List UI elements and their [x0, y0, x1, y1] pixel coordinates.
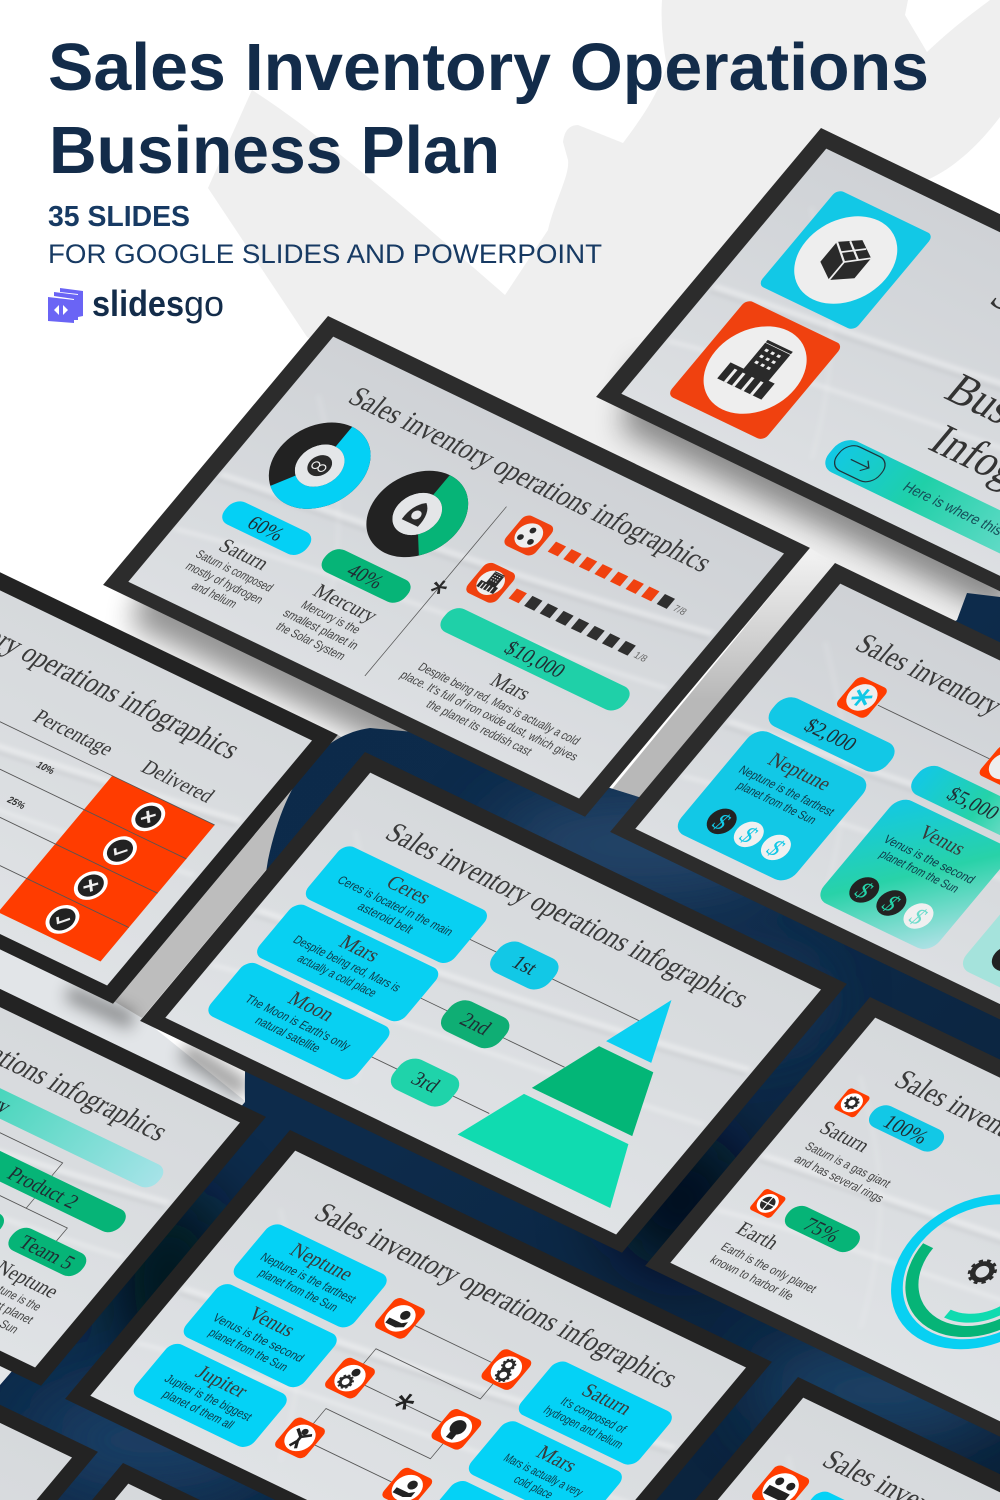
- pill: Product 2: Product 2: [2, 1163, 83, 1213]
- card: Neptune: [229, 1221, 391, 1331]
- icon: gears: [479, 1347, 534, 1392]
- pill: $5,000: [905, 761, 1000, 845]
- background: grey gap at left: [112, 735, 365, 1018]
- card: third right: [414, 1478, 577, 1500]
- connector lines: [0, 1108, 105, 1241]
- card: Moon: natural satellite: [252, 1014, 324, 1055]
- pill: $2,000: $2,000: [799, 715, 861, 756]
- icon: check: [96, 831, 144, 870]
- pill: 75%: [779, 1202, 865, 1256]
- icon: cyan asterisk: [834, 675, 889, 720]
- card: Neptune: $: [707, 809, 735, 836]
- subtitle: slide count: 35 SLIDES: [48, 201, 190, 233]
- text block: Saturn: Saturn: [214, 535, 274, 575]
- card: Ceres: Ceres: [381, 872, 435, 909]
- cover title: [876, 270, 1000, 548]
- progress bar: 1/8: 1/8: [631, 650, 650, 665]
- icon: check: [39, 900, 86, 939]
- pill: Team 5: [3, 1224, 92, 1280]
- card: Venus: Venus is the second: [880, 832, 978, 886]
- divider with asterisk: [358, 503, 513, 679]
- card: Moon: The Moon is Earth's only: [242, 992, 355, 1053]
- text block: Earth: Earth: [731, 1218, 783, 1254]
- connector line: [878, 705, 989, 759]
- donut chart: 60%: [266, 423, 373, 509]
- text block: Mars: the planet its reddish cast: [423, 697, 536, 758]
- panel: bottom left slide: [0, 1220, 98, 1500]
- card: Venus: Venus: [914, 822, 970, 860]
- card: Jupiter: planet of them all: [159, 1387, 237, 1432]
- card: Saturn: hydrogen and helium: [541, 1403, 626, 1451]
- radial gauge chart: [862, 1175, 1000, 1369]
- donut chart: 40%: [364, 471, 471, 557]
- card: Neptune: $: [734, 822, 762, 849]
- card: Mars: [464, 1418, 627, 1500]
- text block: Earth: Earth is the only planet: [718, 1240, 820, 1296]
- text block: Mars: place. It's full of iron oxide dust, which gives: [397, 668, 581, 764]
- background: navy silhouette: [0, 593, 1000, 1500]
- card: Neptune: Neptune: [763, 749, 836, 795]
- card: Ceres: asteroid belt: [354, 900, 417, 936]
- icon: light bulb: [429, 1407, 484, 1452]
- icon: box on cyan tile: [758, 189, 934, 331]
- card: Mars: actually a cold place: [294, 951, 380, 1000]
- pill: 60%: 60%: [242, 512, 289, 546]
- text block: Saturn: mostly of hydrogen: [183, 559, 266, 606]
- text block: Saturn: [791, 1117, 916, 1205]
- icon: center gear: [964, 1257, 1000, 1286]
- card: Moon: Moon: [283, 988, 339, 1026]
- text block: Saturn: Saturn: [815, 1117, 874, 1157]
- subtitle: compatibility: FOR GOOGLE SLIDES AND POWERPOINT: [48, 239, 602, 269]
- table headers: Percentage: [28, 706, 118, 760]
- pyramid chart: [458, 965, 752, 1208]
- title: [48, 30, 929, 188]
- card: third planet: [957, 864, 1000, 1022]
- text block: Mercury: [270, 576, 387, 664]
- text block: Mercury: Mercury: [308, 580, 383, 627]
- icon: cross: [67, 866, 115, 905]
- text block: Mars: Mars: [485, 670, 535, 705]
- card: Mars: Despite being red, Mars is: [290, 933, 404, 995]
- title: Business Plan: [49, 113, 500, 188]
- panel: donut charts and progress slide: [103, 316, 810, 817]
- panel: network slide: [65, 1130, 772, 1500]
- card: Jupiter: [129, 1341, 292, 1450]
- pill: 2nd: 2nd: [455, 1009, 496, 1040]
- pill: 1st: [484, 937, 565, 994]
- navy highlights: [30, 795, 1000, 1490]
- pill: $10,000: $10,000: [499, 637, 570, 682]
- pill: 2nd: [435, 996, 516, 1053]
- pill: 40%: [316, 545, 416, 606]
- pill: 100%: 100%: [878, 1111, 933, 1149]
- card: Venus: planet from the Sun: [205, 1326, 291, 1374]
- panel: gauge slide: [645, 997, 1000, 1498]
- text block: Mercury: smallest planet in: [280, 606, 362, 652]
- background: light grey silhouette: [208, 0, 1000, 800]
- card: Ceres: Ceres is located in the main: [334, 873, 456, 939]
- text block: Earth: [707, 1218, 839, 1309]
- pill: Inventory: [0, 1052, 169, 1191]
- card: Ceres: [301, 843, 492, 966]
- card: Neptune: planet from the Sun: [734, 779, 820, 827]
- text block: Mercury: Mercury is the: [298, 598, 364, 637]
- card: Venus: [814, 795, 1000, 953]
- icon: slidesgo logo mark: [48, 288, 83, 323]
- card: Saturn: Saturn: [577, 1380, 636, 1419]
- background: pale area at lower left: [0, 940, 270, 1400]
- card: Jupiter: Jupiter: [191, 1362, 252, 1402]
- card: Venus: Venus: [243, 1303, 300, 1341]
- table rows: [0, 658, 215, 928]
- icon: asterisk: *: [373, 1383, 426, 1435]
- icon: second marker: [977, 744, 1000, 788]
- progress bar: 7/8: 7/8: [670, 603, 689, 618]
- panel: bottom centre slide: [0, 1463, 605, 1500]
- background: grey gap between slides: [585, 548, 835, 835]
- table rows: 25%: [4, 795, 28, 812]
- card: Neptune: Neptune is the farthest: [257, 1250, 360, 1306]
- slide title: Sales inventory operations infographics: [342, 381, 719, 578]
- icon: team: [501, 513, 556, 558]
- connector lines: [366, 937, 641, 1139]
- logo wordmark: go: [184, 283, 224, 324]
- card: Venus: $: [876, 890, 905, 917]
- pill: Product 2: [0, 1139, 131, 1236]
- card: Neptune: $: [761, 835, 790, 862]
- card: Venus: Venus is the second: [209, 1311, 307, 1365]
- arrow pill: [818, 435, 1000, 603]
- panel: product tree slide: [0, 885, 266, 1386]
- card: Moon: [204, 960, 394, 1083]
- card: Neptune: Neptune is the farthest: [736, 763, 838, 819]
- card: Venus: $: [904, 903, 932, 930]
- pill: 100%: [864, 1102, 949, 1155]
- progress bar: 1/8: [507, 588, 652, 665]
- icon: hand with coin: [380, 1466, 435, 1500]
- card: Venus: $: [849, 877, 878, 904]
- text block: Mars: Despite being red, Mars is actually a cold: [415, 660, 583, 748]
- card: Neptune: Neptune: [285, 1240, 358, 1285]
- text block: Saturn: and helium: [189, 579, 240, 611]
- text block: Neptune: [0, 1255, 63, 1339]
- pill: $2,000: [762, 693, 901, 776]
- progress bar: 7/8: [546, 542, 691, 618]
- text block: Saturn: [173, 529, 291, 618]
- slide title: Sales inventory operations infographics: [308, 1197, 685, 1394]
- card: Saturn: [514, 1358, 677, 1468]
- table rows: 10%: [33, 760, 57, 777]
- pill: $10,000: [435, 604, 635, 714]
- card: Mars: Mars: [334, 932, 384, 967]
- card: Saturn: It's composed of: [558, 1395, 630, 1436]
- icon: people: [749, 1464, 812, 1500]
- title: Sales Inventory Operations: [48, 30, 929, 105]
- icon: building: [463, 561, 518, 605]
- pill: 3rd: [384, 1054, 466, 1111]
- text block: Saturn: Saturn is composed: [193, 547, 276, 595]
- pill: 60%: [217, 498, 317, 559]
- lower left shadows: [65, 985, 250, 1098]
- icon: cross: [124, 798, 172, 836]
- card: cyan: [770, 1488, 941, 1500]
- panel: table slide: [0, 503, 338, 1004]
- logo wordmark: slides: [92, 283, 184, 324]
- table headers: [28, 705, 219, 808]
- delivered column: [0, 776, 215, 961]
- panel: price cards slide: [610, 563, 1000, 1064]
- icon: person with gear: [322, 1356, 378, 1400]
- pill: 40%: 40%: [342, 560, 388, 593]
- pill: Team 5: Team 5: [14, 1232, 79, 1274]
- panel: cover slide with icons: [596, 128, 1000, 630]
- card: Mars: [252, 901, 443, 1025]
- text block: Saturn: Saturn is a gas giant: [802, 1139, 894, 1191]
- panel: pyramid slide: [140, 752, 847, 1253]
- text block: Saturn: and has several rings: [791, 1152, 887, 1205]
- slide shadows: [130, 360, 1000, 835]
- table headers: Delivered: [136, 757, 219, 808]
- icon: raised arm person: [272, 1416, 328, 1460]
- pill: 75%: 75%: [798, 1214, 844, 1247]
- pill: Team 4: [0, 1184, 9, 1240]
- divider with asterisk: *: [412, 571, 457, 615]
- card: Venus: [179, 1281, 342, 1391]
- text block: Earth: known to harbor life: [707, 1253, 797, 1303]
- pill: 1st: 1st: [507, 952, 542, 980]
- text block: Mercury: the Solar System: [273, 619, 349, 663]
- icon: hand with person: [372, 1296, 428, 1341]
- card: Neptune: [671, 727, 873, 885]
- card: Mars: Mars: [531, 1442, 582, 1477]
- pill: 3rd: 3rd: [406, 1068, 445, 1097]
- icon: globe: [748, 1188, 787, 1219]
- icon: building on orange tile: [667, 299, 843, 441]
- connector lines: [301, 1319, 505, 1489]
- card: Jupiter: Jupiter is the biggest: [161, 1372, 256, 1424]
- slide title: Sales inventory operations infographics: [379, 817, 756, 1014]
- icon: gear: [833, 1087, 871, 1118]
- panel: bottom right slide: [573, 1377, 1000, 1500]
- card: Neptune: planet from the Sun: [255, 1266, 341, 1314]
- card: Venus: planet from the Sun: [876, 847, 962, 895]
